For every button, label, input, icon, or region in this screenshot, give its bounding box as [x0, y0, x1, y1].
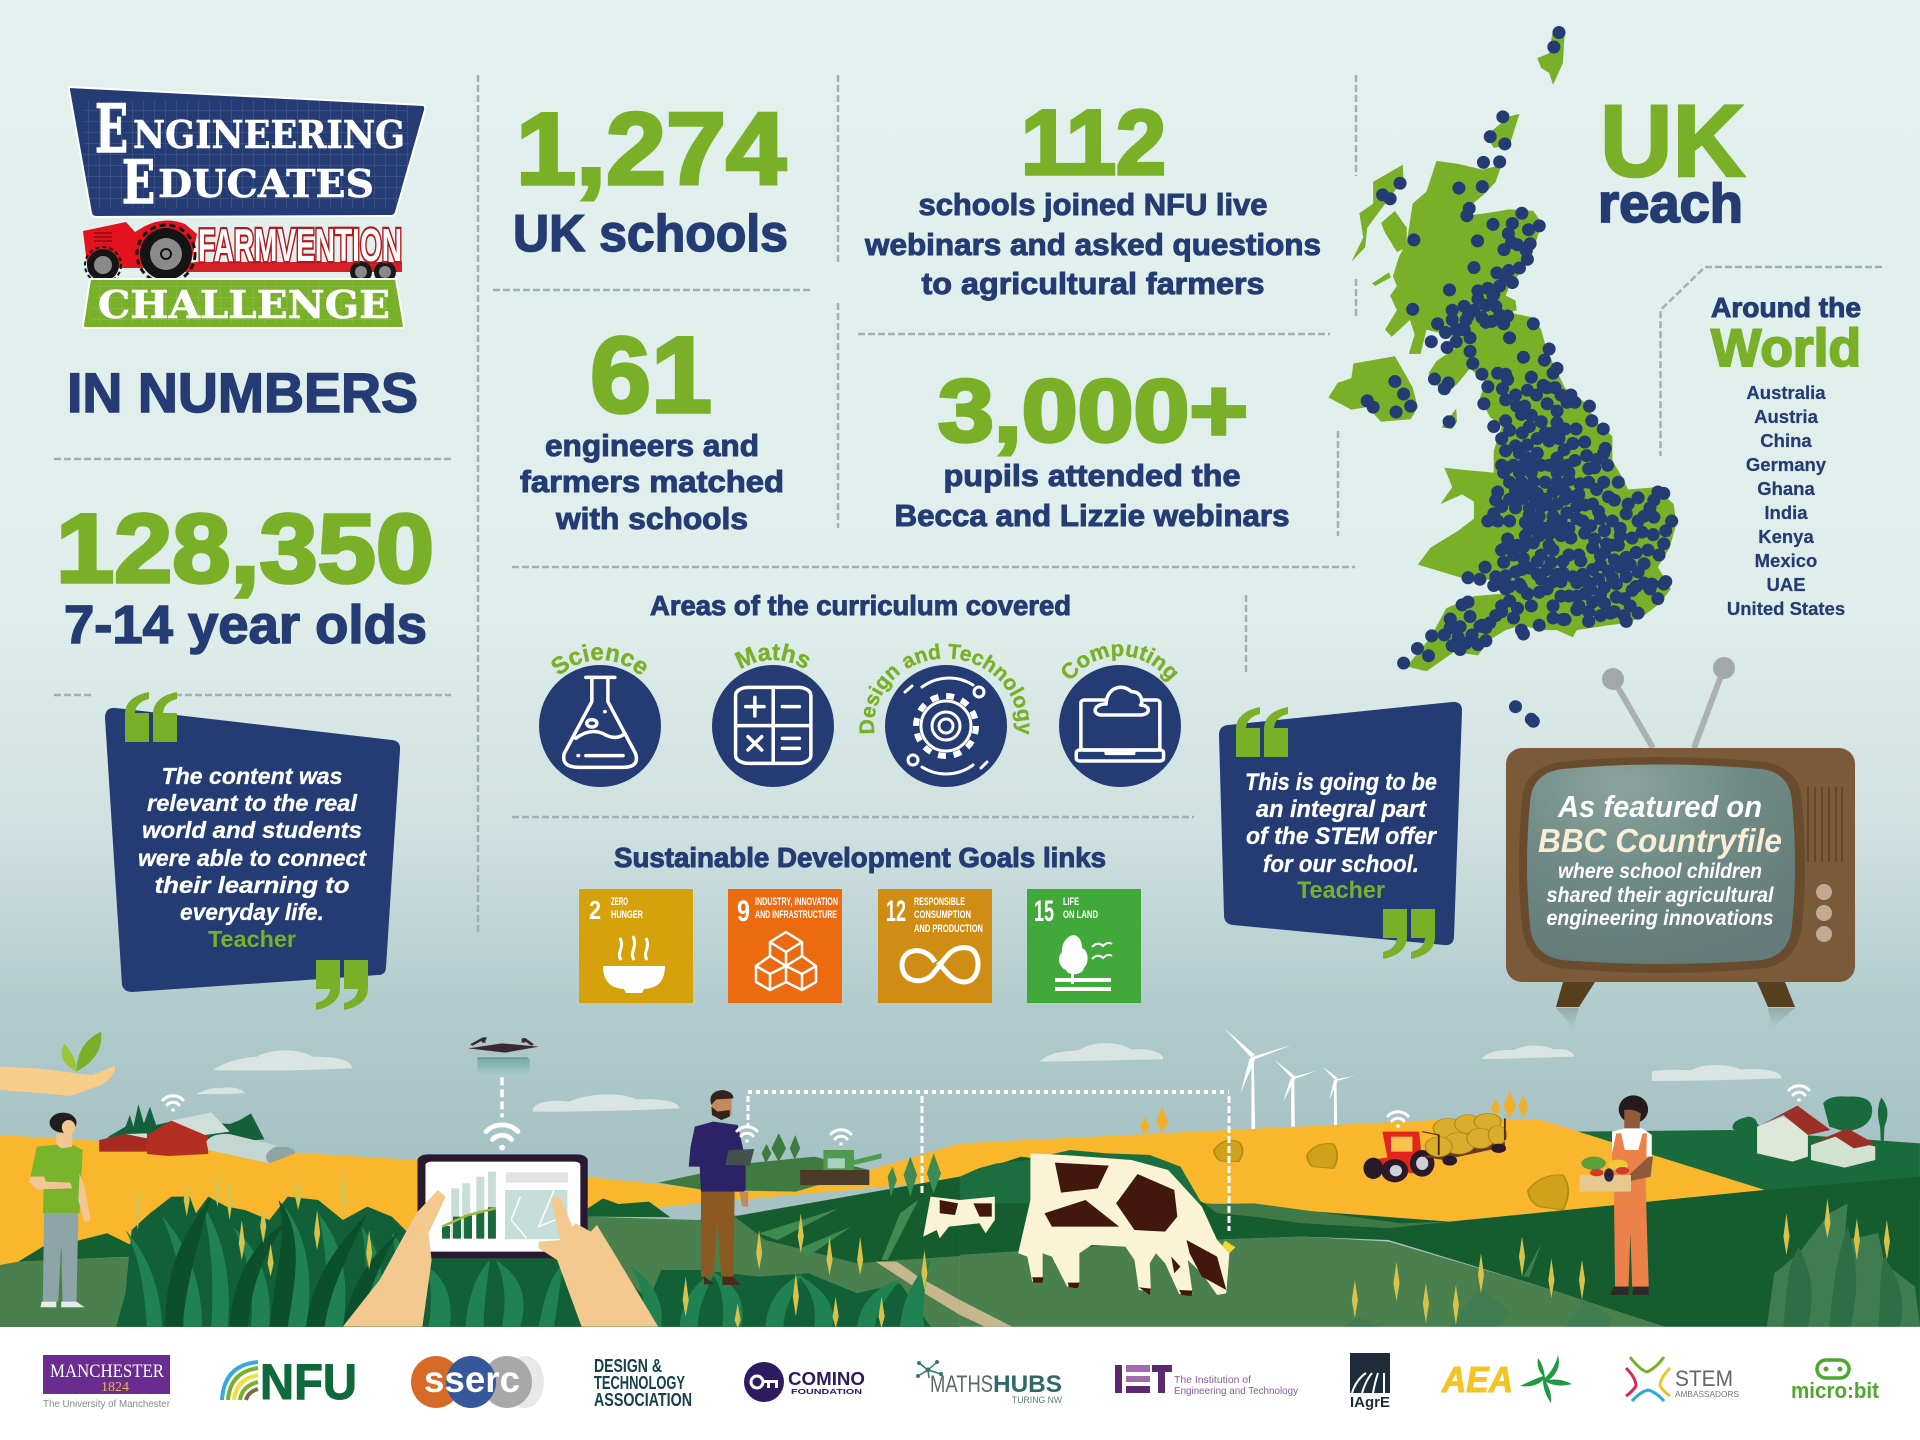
person: bearded farmer: [689, 1090, 754, 1285]
stat: 112 schools joined webinars: schools joined NFU live: [918, 187, 1268, 222]
tv text: [1538, 789, 1782, 930]
logo Farmvention: FARMVENTION: [198, 219, 402, 271]
country list: Austria: [1754, 406, 1819, 427]
logo heading text: DUCATES: [158, 161, 374, 206]
heading: in numbers: IN NUMBERS: [67, 361, 418, 424]
footer band: [0, 1327, 1920, 1440]
logo heading text: [95, 90, 405, 218]
logo: AEA: AEA: [1441, 1359, 1513, 1400]
closing quote mark: [1383, 909, 1435, 959]
icon: design and technology gear: Design and Technology: [859, 643, 1030, 735]
heading: sustainable development goals: Sustainable Development Goals links: [614, 842, 1106, 873]
quote text: for our school.: [1263, 851, 1419, 878]
logo: SSERC: sserc: [424, 1359, 520, 1400]
path: [875, 1262, 960, 1315]
logo: IAgrE: IAgrE: [1350, 1394, 1390, 1411]
SDG 12 responsible consumption: RESPONSIBLE: [914, 896, 965, 908]
heading: UK reach: reach: [1598, 172, 1743, 234]
icon: science flask: [539, 644, 661, 787]
SDG 2 zero hunger: 2: [589, 895, 601, 925]
dark foreground: [960, 1157, 1920, 1327]
tablet with chart: [418, 1154, 588, 1258]
logo: University of Manchester: [43, 1355, 170, 1410]
quote text: of the STEM offer: [1246, 823, 1438, 850]
SDG 9 industry: INDUSTRY, INNOVATION: [755, 896, 838, 908]
SDG 2 zero hunger: HUNGER: [611, 909, 643, 921]
icon: maths calculator: [712, 643, 834, 787]
tv text: BBC Countryfile: [1538, 822, 1782, 859]
SDG 15 life on land: 15: [1034, 895, 1054, 928]
stat: 128,350: 128,350: [56, 494, 434, 603]
distant yellow trees: [1140, 1091, 1528, 1134]
clouds: [196, 1050, 680, 1112]
logo green Challenge band: CHALLENGE: [98, 282, 390, 327]
icon: design and technology gear: [859, 643, 1030, 787]
logo: STEM Ambassadors: STEM: [1675, 1366, 1733, 1391]
small cow: [923, 1197, 995, 1238]
quote text: Teacher: [1297, 877, 1385, 904]
yellow fields: [0, 1135, 960, 1267]
closing quote mark: [316, 960, 368, 1010]
wifi icons: [163, 1086, 1809, 1150]
mid green patch: [1205, 1203, 1450, 1228]
tv text: engineering innovations: [1546, 907, 1774, 930]
stat: 112 schools joined webinars: 112: [1021, 92, 1166, 194]
logo: NFU: NFU: [260, 1354, 357, 1410]
logo: STEM Ambassadors: AMBASSADORS: [1675, 1389, 1739, 1399]
dotted sensor links: [748, 1092, 1229, 1231]
farm buildings: [99, 1104, 295, 1163]
heading: UK reach: UK: [1600, 84, 1745, 198]
dashed drone link: [500, 1077, 504, 1117]
stat: 112 schools joined webinars: to agricultural farmers: [922, 266, 1264, 301]
right dark hill: [1572, 1130, 1920, 1207]
scene: left farmland: [0, 1032, 960, 1333]
logo heading text: E: [122, 148, 155, 218]
country list: Australia: [1746, 382, 1826, 403]
stat: 3,000+ pupils: [894, 361, 1290, 533]
SDG 12 responsible consumption: CONSUMPTION: [914, 909, 971, 921]
logo: IET: [1115, 1365, 1299, 1397]
tv text: where school children: [1558, 860, 1762, 883]
icon: computing laptop with cloud: Computing: [1062, 644, 1178, 682]
antennas: [1602, 657, 1735, 748]
logo: Maths Hubs: HUBS: [993, 1371, 1062, 1398]
icon: maths calculator: Maths: [734, 643, 810, 669]
tv screen: [1527, 764, 1795, 964]
SDG 12 responsible consumption: [878, 889, 992, 1003]
logo: STEM Ambassadors: [1626, 1357, 1739, 1401]
stat: 61 engineers and farmers: with schools: [555, 501, 748, 536]
quote text: were able to connect: [138, 845, 367, 871]
logo: IET: The Institution of: [1174, 1374, 1251, 1386]
stat: 112 schools joined webinars: [864, 92, 1321, 301]
icon: science flask: Science: [551, 644, 646, 674]
logo: Maths Hubs: MATHS: [930, 1371, 993, 1398]
logo: Design and Technology Association: TECHNOLOGY: [594, 1373, 685, 1393]
clouds: [1040, 1043, 1782, 1081]
SDG 15 life on land: [1027, 889, 1141, 1003]
logo: Design and Technology Association: [594, 1356, 692, 1410]
stat: 1,274 UK schools: [513, 92, 788, 263]
logo: Engineering Educates Farmvention Challenge: [69, 87, 425, 328]
tv text: shared their agricultural: [1546, 884, 1775, 907]
person: farmer with vegetables: [1580, 1095, 1653, 1295]
quote text: [138, 763, 367, 952]
country list: India: [1764, 502, 1808, 523]
stat: 128,350: 7-14 year olds: [64, 595, 427, 655]
country list: UAE: [1766, 574, 1806, 595]
crops left: [116, 1167, 931, 1328]
quote text: an integral part: [1256, 796, 1427, 823]
logo: IET: Engineering and Technology: [1174, 1385, 1299, 1397]
yellow hill: [960, 1120, 1765, 1222]
map school dots: [1367, 32, 1672, 721]
SDG 9 industry: 9: [737, 895, 750, 928]
country list: [1727, 382, 1845, 619]
logo: SSERC: [411, 1356, 544, 1408]
hedge: [960, 1150, 1202, 1203]
red tractor and trailer: [1363, 1113, 1507, 1182]
heading: areas of the curriculum: Areas of the curriculum covered: [650, 590, 1071, 621]
stat: 3,000+ pupils: 3,000+: [938, 361, 1248, 460]
hills dark: [18, 1198, 670, 1262]
icon: computing laptop with cloud: [1059, 644, 1181, 787]
logo: NFU: [222, 1354, 357, 1410]
logo: IAgrE: [1350, 1353, 1390, 1411]
quote text: world and students: [142, 817, 362, 843]
SDG 12 responsible consumption: 12: [886, 895, 906, 928]
SDG 2 zero hunger: ZERO: [611, 896, 628, 908]
logo: Comino Foundation: [744, 1362, 865, 1402]
stat: 128,350: [56, 494, 434, 655]
quote text: This is going to be: [1245, 769, 1437, 796]
stat: 61 engineers and farmers: 61: [590, 314, 712, 435]
stat: 61 engineers and farmers: engineers and: [545, 428, 759, 463]
country list: Kenya: [1758, 526, 1814, 547]
quote text: their learning to: [154, 872, 350, 898]
stat: 112 schools joined webinars: webinars and asked questions: [864, 227, 1321, 262]
drone: [468, 1038, 539, 1075]
farmhouses: [1733, 1096, 1887, 1168]
logo: AEA: [1441, 1355, 1572, 1403]
logo: Design and Technology Association: DESIGN &: [594, 1356, 662, 1376]
tv knobs: [1816, 884, 1832, 942]
tv text: As featured on: [1557, 789, 1762, 824]
logo: micro:bit: micro:bit: [1791, 1378, 1880, 1403]
quote panel: right teacher: [1219, 702, 1462, 959]
SDG 9 industry: AND INFRASTRUCTURE: [755, 909, 837, 921]
logo heading text: E: [95, 90, 128, 168]
panel: television, BBC Countryfile: [1506, 657, 1855, 1028]
tv grille: [1808, 787, 1842, 862]
harvester: [800, 1150, 941, 1197]
quote text: [1245, 769, 1438, 904]
SDG 2 zero hunger: [579, 889, 693, 1003]
logo: University of Manchester: MANCHESTER: [50, 1361, 164, 1382]
country list: Ghana: [1757, 478, 1815, 499]
quote panel: left teacher: [105, 692, 400, 1010]
panel: around the world: World: [1711, 319, 1861, 378]
scene: right farmland: [960, 1028, 1920, 1327]
hands on tablet: [343, 1190, 658, 1327]
panel: around the world: Around the: [1711, 292, 1861, 323]
quote text: The content was: [162, 763, 342, 789]
stat: 61 engineers and farmers: farmers matched: [520, 464, 784, 499]
front green ground: [960, 1237, 1664, 1327]
opening quote mark: [125, 692, 177, 742]
wind turbines: [1224, 1028, 1355, 1129]
hay bales: [1214, 1140, 1568, 1210]
panel: SDG tiles: [579, 889, 1141, 1003]
quote text: relevant to the real: [147, 790, 357, 816]
country list: Mexico: [1755, 550, 1817, 571]
map landmass: [1328, 29, 1676, 671]
country list: China: [1760, 430, 1812, 451]
SDG 12 responsible consumption: AND PRODUCTION: [914, 923, 983, 935]
country list: United States: [1727, 598, 1845, 619]
logo: University of Manchester: The University of Manchester: [43, 1398, 170, 1410]
logo: Design and Technology Association: ASSOCIATION: [594, 1390, 692, 1410]
stat: 3,000+ pupils: pupils attended the: [944, 458, 1240, 493]
opening quote mark: [1236, 707, 1288, 757]
SDG 9 industry: [728, 889, 842, 1003]
stat: 3,000+ pupils: Becca and Lizzie webinars: [894, 498, 1290, 533]
green ground: [0, 1177, 960, 1333]
logo: Maths Hubs: [916, 1360, 1062, 1405]
logo: micro:bit: [1791, 1360, 1880, 1403]
dashed dividers: [54, 75, 1882, 935]
SDG 15 life on land: LIFE: [1063, 896, 1079, 908]
SDG 15 life on land: ON LAND: [1063, 909, 1098, 921]
large cow: [1018, 1153, 1235, 1296]
hand with seedling: [0, 1032, 115, 1096]
curriculum icons: [539, 643, 1181, 787]
country list: Germany: [1746, 454, 1827, 475]
logo: Maths Hubs: TURING NW: [1012, 1395, 1062, 1405]
quote text: everyday life.: [180, 899, 324, 925]
back hill with trees: [658, 1133, 869, 1192]
stat: 1,274 UK schools: 1,274: [516, 92, 786, 206]
stat: 1,274 UK schools: UK schools: [513, 205, 788, 263]
tv legs: [1556, 982, 1795, 1028]
logo: University of Manchester: 1824: [101, 1380, 129, 1395]
map: UK school locations: [1328, 29, 1676, 721]
logo heading text: NGINEERING: [133, 112, 405, 157]
stat: 61 engineers and farmers: [520, 314, 784, 536]
logo tractor: [83, 220, 402, 283]
panel: around the world: [1711, 292, 1861, 619]
crops right: [1346, 1198, 1920, 1327]
logo: Comino Foundation: COMINO: [788, 1369, 865, 1389]
quote text: Teacher: [208, 926, 296, 952]
person: man with glasses: [29, 1113, 91, 1307]
logo: Comino Foundation: FOUNDATION: [791, 1387, 862, 1396]
